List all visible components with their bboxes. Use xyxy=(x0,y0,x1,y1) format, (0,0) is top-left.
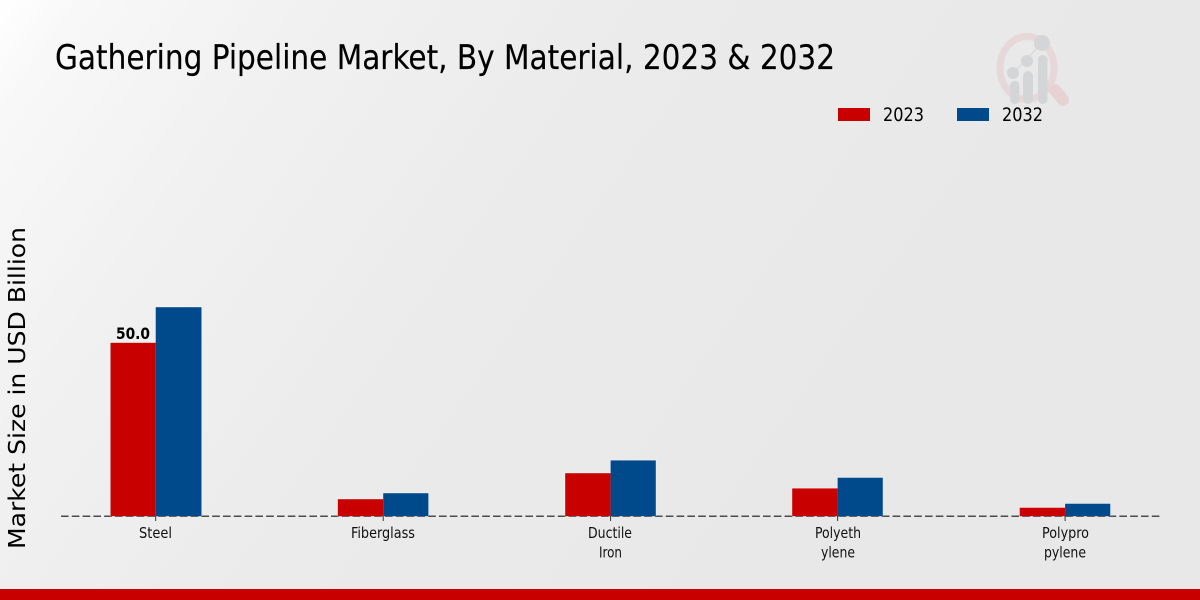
label: Polyethylene: ylene xyxy=(821,544,855,562)
label: Polypropylene: pylene xyxy=(1044,544,1086,562)
baseline xyxy=(61,515,1160,517)
legend swatch 2023 xyxy=(838,108,870,121)
bars: Steel xyxy=(110,306,202,516)
bars: Ductile Iron xyxy=(565,460,656,516)
legend xyxy=(838,105,1043,126)
label: Polyethylene: Polyeth xyxy=(815,524,861,542)
bars: Polypropylene xyxy=(1019,503,1111,516)
legend label 2032: 2032 xyxy=(1002,105,1043,126)
label: Polyethylene xyxy=(815,524,861,562)
label: Polypropylene xyxy=(1042,524,1089,562)
footer bar xyxy=(0,589,1200,600)
legend label 2023: 2023 xyxy=(883,105,924,126)
label: Ductile Iron: Ductile xyxy=(588,524,632,542)
y axis label: Market Size in USD Billion xyxy=(5,227,31,549)
bars: Fiberglass xyxy=(337,492,429,516)
label: Ductile Iron xyxy=(588,524,632,562)
ticks xyxy=(156,516,1065,521)
label: Polypropylene: Polypro xyxy=(1042,524,1089,542)
label: Steel: Steel xyxy=(139,524,172,542)
label: Fiberglass: Fiberglass xyxy=(351,524,415,542)
bar chart xyxy=(110,306,1111,516)
icon: watermark logo xyxy=(1000,35,1063,104)
category labels xyxy=(139,524,1089,562)
baseline overlay xyxy=(61,516,1160,518)
bars: Polyethylene xyxy=(792,477,883,516)
legend swatch 2032 xyxy=(957,108,989,121)
title: Gathering Pipeline Market, By Material, 2023 & 2032 xyxy=(55,38,835,77)
label: Ductile Iron: Iron xyxy=(599,544,622,562)
data label: 50.0 xyxy=(116,324,150,343)
